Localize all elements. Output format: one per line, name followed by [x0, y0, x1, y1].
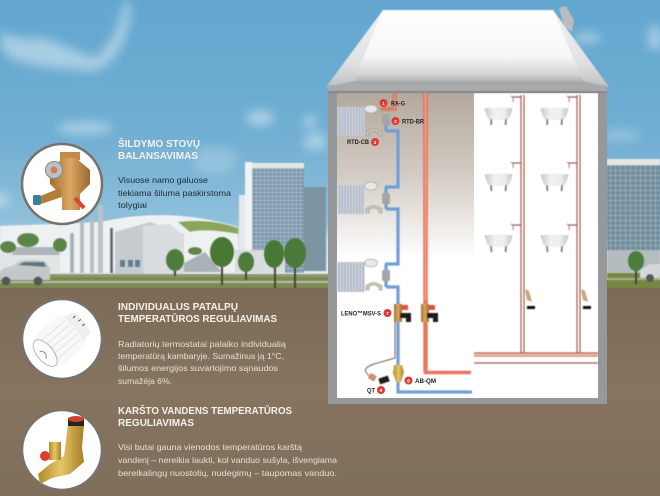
label: AB-QM [404, 376, 436, 385]
city skyline [0, 159, 660, 274]
heading [118, 404, 292, 429]
text block: bereikalingų nuostolių, nudegimų – taupomas vanduo. [118, 468, 337, 478]
panel: balancing [22, 137, 231, 224]
text block: sumažėja 6%. [118, 376, 172, 386]
icon: hot water valve [22, 410, 102, 490]
heading: ŠILDYMO STOVŲ [118, 137, 200, 150]
heating room backdrop [337, 93, 474, 258]
right office tower [607, 159, 660, 273]
label: RA-G: 1 [382, 101, 385, 106]
text block: Radiatorių termostatai palaiko individualią [118, 339, 286, 349]
bathtubs [484, 108, 569, 252]
text block: Visi butai gauna vienodos temperatūros karštą [118, 442, 302, 452]
balancing valves [382, 114, 390, 281]
icon: thermostat [22, 299, 102, 379]
panel: room temperature [22, 299, 286, 386]
radiators [337, 107, 365, 292]
impulse tube [365, 322, 395, 380]
house interior [337, 93, 598, 398]
domed factory [0, 205, 238, 274]
blue pipes [385, 124, 472, 392]
roof [326, 10, 609, 93]
label: RTD-CB: 3 [374, 140, 377, 145]
tall office towers [239, 162, 326, 274]
house cross-section [326, 6, 609, 404]
background: sky [0, 0, 660, 280]
AB-QM valve and actuator [368, 365, 404, 384]
text block: Visuose namo galuose [118, 175, 208, 185]
text block [118, 442, 337, 478]
text block: temperatūrą kambaryje. Sumažinus ją 1°C, [118, 351, 284, 361]
red pipes [381, 93, 426, 372]
label: QT: 9 [380, 388, 383, 393]
hot water valves [525, 289, 591, 309]
thermostatic heads [364, 105, 382, 290]
label: QT [367, 386, 385, 394]
car right [640, 264, 660, 282]
low houses [0, 247, 285, 273]
car left [0, 260, 50, 286]
label: RTD-BR [392, 117, 424, 126]
heading: BALANSAVIMAS [118, 151, 198, 162]
label: RTD-CB: RTD-CB [347, 139, 369, 146]
label: LENO MSV-S: 7 [386, 311, 389, 316]
heading [118, 302, 277, 325]
panel: hot water [22, 404, 337, 490]
text block: tolygiai [118, 200, 147, 210]
partner valves [394, 304, 438, 322]
ground [0, 288, 660, 496]
heading: TEMPERATŪROS REGULIAVIMAS [118, 313, 277, 325]
text block: šilumos energijos suvartojimo sąnaudos [118, 363, 278, 373]
label: AB-QM: AB-QM [415, 378, 436, 385]
label: QT: QT [367, 388, 375, 394]
trees [166, 237, 644, 292]
label: RTD-CB [347, 138, 379, 146]
roof chimney [559, 6, 574, 32]
label: AB-QM: 8 [407, 378, 410, 384]
text block: vandenį – nereikia laukti, kol vanduo sušyla, išvengiama [118, 455, 337, 465]
label: RA-G: RA-G [391, 100, 405, 108]
bushes [0, 233, 202, 255]
heading: INDIVIDUALUS PATALPŲ [118, 302, 238, 313]
grass strip [0, 273, 660, 288]
label: RA-G [380, 99, 405, 108]
pale horizontal pipe fill [474, 354, 598, 356]
house wall [328, 85, 607, 404]
heading: KARŠTO VANDENS TEMPERATŪROS [118, 404, 292, 417]
label: RTD-BR: RTD-BR [402, 118, 424, 126]
icon: balancing valve [22, 144, 102, 224]
heading: REGULIAVIMAS [118, 418, 194, 429]
text block [118, 339, 286, 386]
text block [118, 175, 231, 210]
label: RTD-BR: 2 [394, 119, 397, 124]
hot water return pipe [426, 300, 471, 372]
water risers [474, 95, 598, 363]
faucets [511, 96, 569, 230]
labels [341, 99, 436, 394]
clouds [0, 0, 660, 207]
text block: tiekiama šiluma paskirstoma [118, 188, 231, 198]
heading [118, 137, 200, 162]
label: LENO MSV-S: LENO™MSV-S [341, 310, 382, 318]
